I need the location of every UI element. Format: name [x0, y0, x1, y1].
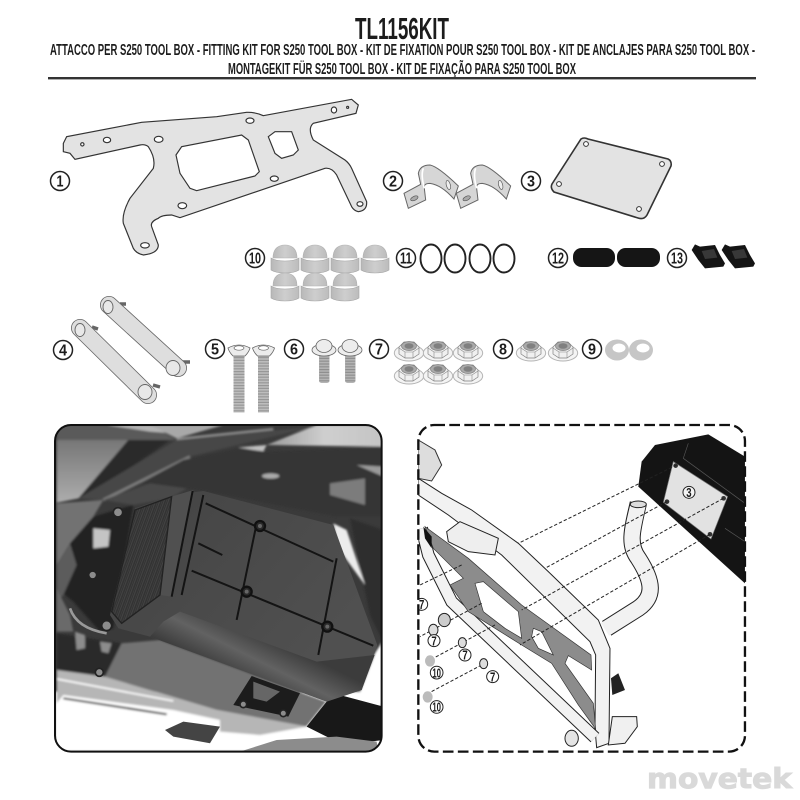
lower tube: [422, 528, 595, 738]
dashed assembly lines: [420, 465, 723, 693]
small callouts: 7: [462, 648, 468, 663]
bracket in grey: [425, 527, 596, 729]
callout 12: 12: [552, 250, 564, 268]
callout 12: [548, 248, 568, 268]
part 12: black pads: [573, 248, 660, 267]
callout 13: 13: [671, 250, 683, 268]
callout 5: [206, 340, 224, 358]
part 8: flange nuts: [516, 342, 578, 361]
part 6: short screws: [312, 340, 362, 383]
part 3: plate: [551, 138, 671, 219]
small callouts: 10: [432, 700, 441, 715]
callout 11: 11: [400, 250, 412, 268]
callout 6: [284, 340, 304, 358]
callout 9: [582, 340, 602, 358]
callout 6: 6: [290, 342, 298, 358]
part 9: spacers: [605, 340, 653, 360]
part 5: long screws: [228, 345, 274, 412]
title: TL1156KIT: [355, 11, 449, 46]
part 2: clamps: [404, 165, 511, 208]
watermark: movetek: [647, 762, 793, 795]
part 13: black rubbers: [692, 244, 755, 268]
callout 10: [246, 248, 264, 268]
callout 7: [370, 340, 388, 358]
callout 13: [668, 248, 686, 268]
diagram panel: exploded mounting view: [416, 425, 745, 752]
callout 4: 4: [59, 342, 67, 360]
part 7: flange nuts: [394, 342, 483, 384]
callout 9: 9: [588, 342, 596, 358]
callout 11: [396, 248, 416, 268]
callout 10: 10: [249, 250, 261, 268]
callout 3: [522, 172, 540, 190]
small callouts: [416, 597, 499, 715]
callout 2: 2: [389, 174, 397, 190]
callout 8: [494, 340, 512, 358]
tool box with plate 3: 3: [686, 485, 692, 500]
small callouts: 7: [431, 633, 437, 648]
callout 7: 7: [375, 342, 383, 358]
part 10: caps: [271, 245, 389, 301]
right tube: [605, 501, 650, 629]
small callouts: 7: [490, 669, 495, 684]
part 1: main bracket: [63, 99, 367, 255]
callout 1: [50, 172, 70, 190]
foot and knob: [565, 673, 637, 746]
callout 3: 3: [527, 174, 535, 190]
subtitle: languages line 2: MONTAGEKIT FÜR S250 TOOL BOX - KIT DE FIXAÇÃO PARA S250 TOOL BOX: [228, 60, 576, 78]
callout 1: 1: [56, 174, 64, 190]
photo panel: installed tool box: [55, 425, 383, 752]
callout 8: 8: [499, 342, 507, 358]
part 4: strap bars: [75, 300, 190, 400]
small callouts: 7: [419, 597, 424, 612]
part 11: o-rings: [420, 244, 514, 272]
callout 2: [384, 172, 402, 190]
small callouts: 10: [432, 665, 441, 680]
main tube: [418, 478, 610, 748]
tool box with plate 3: [638, 434, 745, 583]
callout 5: 5: [211, 342, 219, 358]
callout 4: [54, 340, 72, 360]
loose hardware: [423, 613, 488, 703]
